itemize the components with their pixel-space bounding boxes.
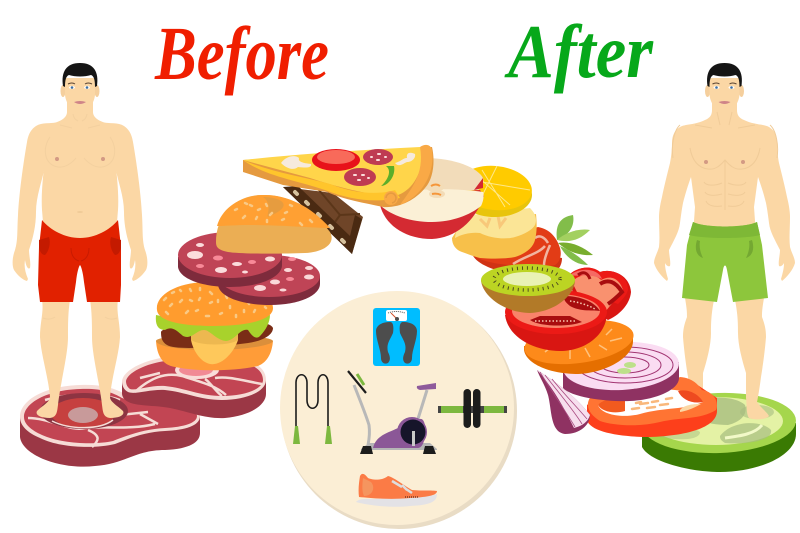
left half of body xyxy=(654,100,725,419)
title: After: After xyxy=(504,10,654,94)
left half of body xyxy=(13,100,80,418)
food: banana slice xyxy=(452,208,537,259)
food: back tomato xyxy=(568,268,631,320)
food: pizza slice xyxy=(243,145,434,207)
title: Before: Before xyxy=(154,12,329,96)
food: burger bun xyxy=(216,195,332,254)
food: red bell pepper ring xyxy=(587,377,717,437)
food: burger xyxy=(156,282,273,370)
food: onion slice xyxy=(562,339,680,401)
green shorts xyxy=(682,222,768,302)
icon: ab roller xyxy=(438,389,507,428)
character: after man xyxy=(654,63,795,419)
food: strawberry xyxy=(472,227,562,276)
head xyxy=(705,63,744,113)
icon: running shoe xyxy=(356,474,437,507)
icon: skipping rope xyxy=(293,375,332,444)
food: strawberry leaves xyxy=(557,215,593,265)
food: apple front half xyxy=(380,182,484,239)
food: back orange slice xyxy=(456,162,534,217)
food: onion wedge xyxy=(537,370,590,434)
red shorts xyxy=(38,220,121,302)
food: apple back half xyxy=(420,158,483,192)
food: large steak under before man xyxy=(20,385,200,467)
icon: bathroom scale xyxy=(373,308,420,366)
food: second steak xyxy=(122,355,266,418)
chest and muscle lines xyxy=(43,114,117,319)
food: tomato slice xyxy=(505,290,607,351)
right half of body xyxy=(724,100,795,419)
food: chocolate bar xyxy=(283,186,363,254)
food: front salami slice xyxy=(178,232,282,287)
right half of body xyxy=(80,100,147,418)
icon: exercise bike xyxy=(348,371,437,454)
food: cucumber slice under after man xyxy=(641,390,797,472)
abs and chest lines xyxy=(672,112,778,210)
character: before man xyxy=(13,63,147,418)
head xyxy=(60,63,100,113)
food: carrot slice xyxy=(522,314,636,374)
exercise circle panel xyxy=(280,291,517,529)
food: back salami slice xyxy=(218,255,320,305)
food: kiwi half xyxy=(481,264,575,313)
